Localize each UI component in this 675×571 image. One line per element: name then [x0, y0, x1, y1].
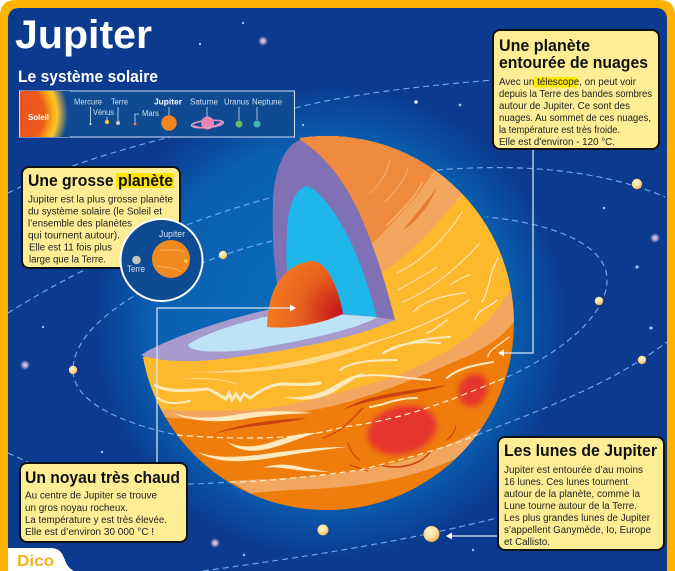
body text: Lune tourne autour de la Terre. — [504, 501, 637, 512]
connector arrow: core — [157, 304, 296, 463]
card: entourée de nuages — [493, 30, 659, 149]
sun — [20, 91, 70, 137]
red storms — [362, 368, 493, 462]
heading: entourée de nuages — [499, 53, 648, 72]
planet Jupiter cutaway — [141, 136, 514, 510]
heading: Une grosse planète — [28, 172, 173, 190]
moons of Jupiter — [69, 179, 646, 542]
purple shell — [273, 140, 395, 320]
Jupiter disc — [152, 240, 190, 278]
card: les lunes de Jupiter — [498, 437, 664, 550]
pale blue floor — [188, 312, 377, 352]
heading: Une planète — [499, 36, 590, 55]
lavender floor — [141, 305, 395, 361]
body text: Elle est 11 fois plus — [29, 242, 112, 254]
body text — [28, 194, 173, 266]
planet labels: Neptune — [252, 98, 283, 106]
body text — [25, 490, 167, 538]
body text: La température y est très élevée. — [25, 515, 167, 526]
planet labels: Jupiter — [154, 98, 182, 106]
planet labels: Saturne — [190, 98, 219, 106]
planet labels — [74, 98, 283, 118]
body text: qui tournent autour). — [28, 230, 120, 242]
body text: Au centre de Jupiter se trouve — [25, 490, 157, 502]
planet outer layers — [143, 136, 514, 510]
connector arrow: moons — [446, 532, 498, 540]
card: un noyau très chaud — [20, 463, 187, 542]
tab: Dico — [8, 548, 74, 571]
body text: Elle est d'environ - 120 °C. — [499, 137, 615, 148]
heading: Les lunes de Jupiter — [504, 442, 658, 460]
cloud streaks — [155, 160, 509, 472]
body text: Jupiter est la plus grosse planète — [28, 194, 173, 206]
body text: et Callisto. — [504, 537, 550, 548]
cyan layer — [286, 186, 377, 317]
heading: Un noyau très chaud — [25, 469, 180, 487]
panel: solar system — [20, 91, 294, 137]
hot core — [267, 261, 343, 328]
planet labels: Mars — [142, 109, 159, 118]
body text — [504, 465, 651, 548]
Jupiter label: Jupiter — [159, 229, 185, 239]
body text: Elle est d’environ 30 000 °C ! — [25, 527, 154, 538]
body text: Les plus grandes lunes de Jupiter — [504, 513, 651, 524]
body text: l’ensemble des planètes — [28, 218, 132, 230]
planet markers — [89, 107, 261, 131]
body text — [499, 77, 652, 148]
body text: autour de la planète, comme la — [504, 489, 640, 500]
body text: large que la Terre. — [29, 254, 106, 266]
body text: Jupiter est entourée d’au moins — [504, 465, 643, 476]
body text: du système solaire (le Soleil et — [28, 206, 162, 218]
orbit passing in front — [177, 377, 507, 482]
title: Jupiter — [15, 13, 152, 57]
body text: depuis la Terre des bandes sombres — [499, 89, 652, 100]
tab: Dico: Dico — [17, 553, 54, 570]
planet labels: Vénus — [93, 108, 114, 117]
Earth label: Terre — [127, 264, 145, 274]
card: une grosse planète — [22, 167, 180, 268]
body text: la température est très froide. — [499, 125, 620, 136]
connector arrow: clouds — [498, 149, 533, 356]
highlight — [116, 173, 174, 188]
planet labels: Terre — [111, 98, 129, 106]
highlight — [534, 77, 577, 88]
body text: s’appellent Ganymède, Io, Europe — [504, 525, 651, 536]
planet labels: Mercure — [74, 98, 103, 106]
planet labels: Uranus — [224, 98, 249, 106]
body text: autour de Jupiter. Ce sont des — [499, 101, 630, 112]
body text: un gros noyau rocheux. — [25, 503, 128, 514]
subtitle: Le système solaire — [18, 68, 158, 86]
sun: Soleil — [28, 113, 49, 122]
body text: 16 lunes. Ces lunes tournent — [504, 477, 628, 488]
size comparison circle — [120, 219, 202, 301]
Earth disc — [132, 256, 141, 264]
body text: nuages. Au sommet de ces nuages, — [499, 113, 651, 124]
heading — [499, 36, 648, 72]
dark bands — [207, 187, 456, 471]
body text: Avec un télescope, on peut voir — [499, 77, 637, 88]
